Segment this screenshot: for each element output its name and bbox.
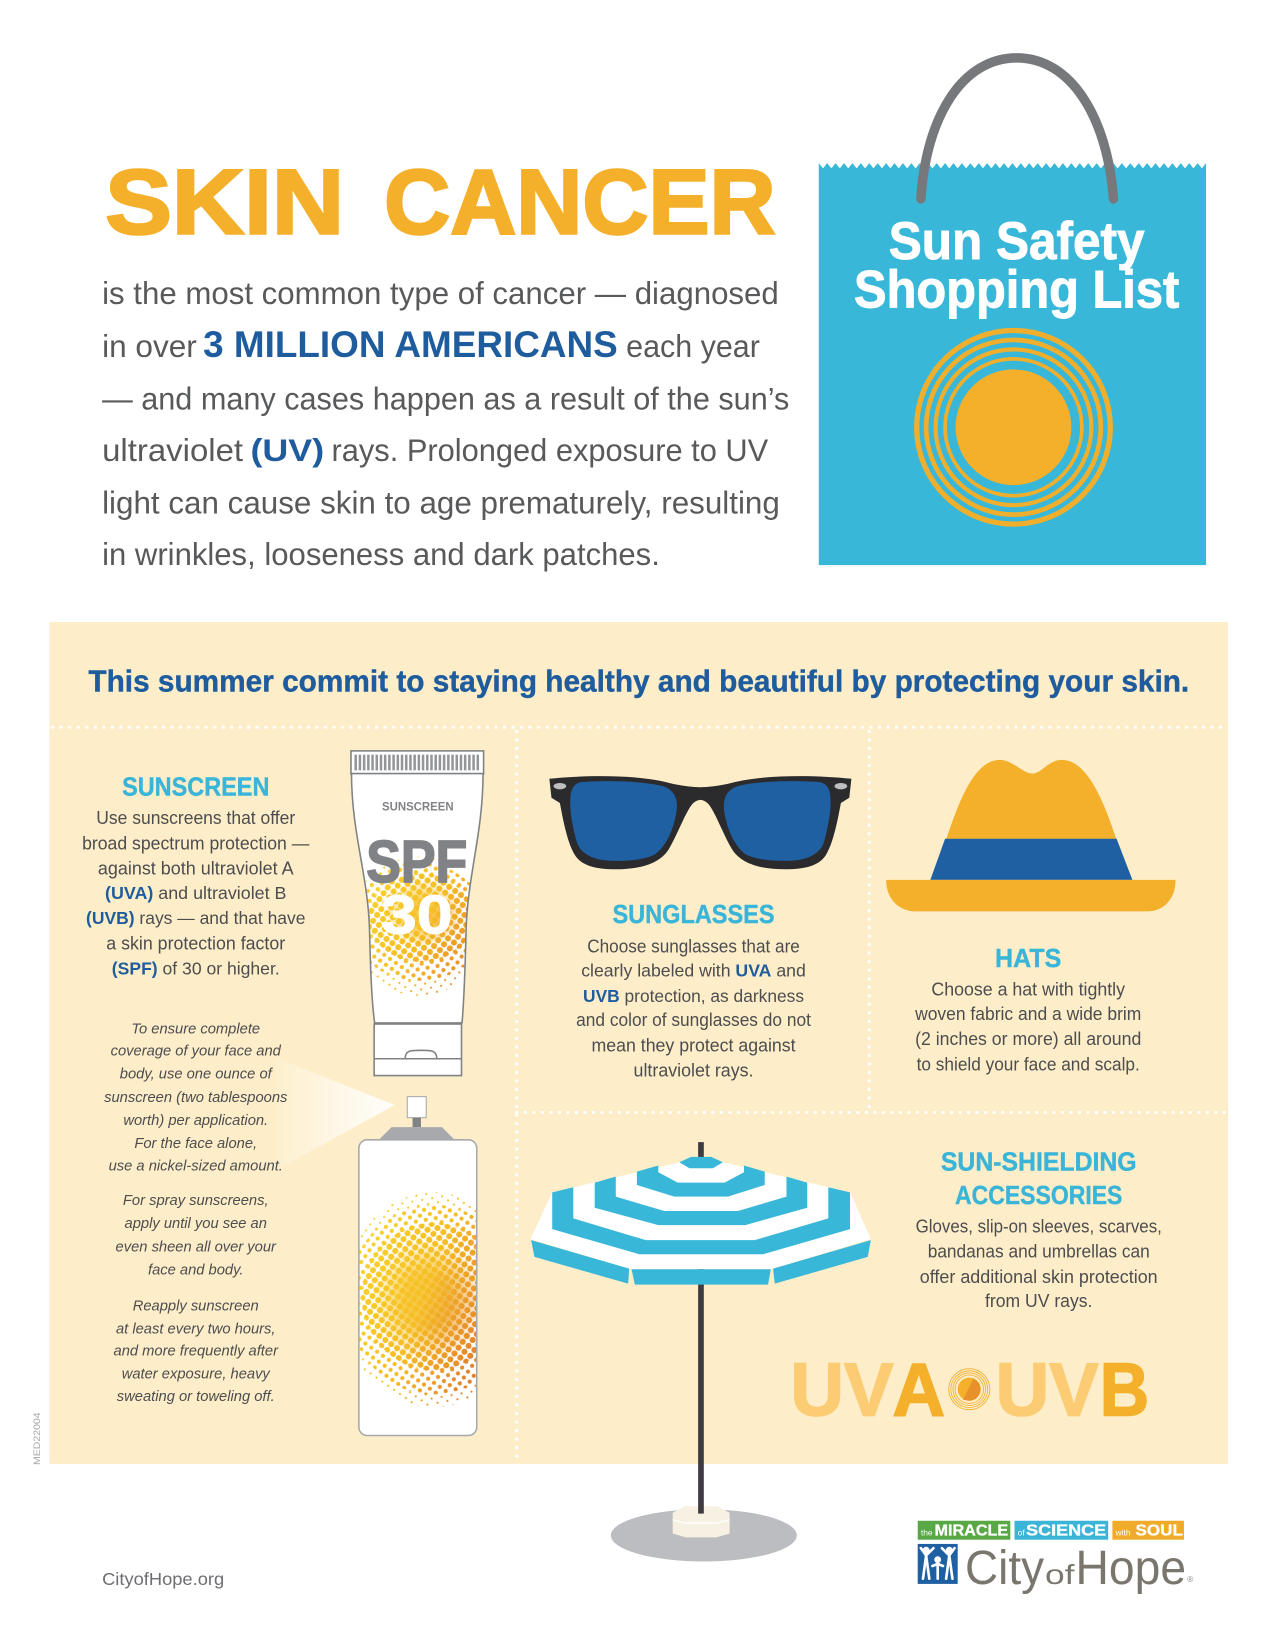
section: sunscreen text: (UVB) rays — and that have — [86, 908, 305, 928]
logo: City of Hope — [918, 1521, 1194, 1595]
footer url: CityofHope.org — [102, 1569, 224, 1589]
intro paragraph — [102, 275, 789, 572]
UVA UVB graphic: A — [892, 1348, 945, 1432]
logo: City of Hope: of — [1045, 1559, 1075, 1590]
section: sunglasses text: clearly labeled with UVA and — [581, 961, 806, 981]
section: sunscreen tips: coverage of your face and — [111, 1044, 282, 1060]
section: sunscreen text: broad spectrum protection — — [82, 832, 310, 853]
section: sunglasses text: Choose sunglasses that are — [587, 935, 800, 956]
section: sunscreen tips — [104, 1021, 288, 1405]
logo: City of Hope: City — [965, 1541, 1045, 1595]
section: sunscreen text: (UVA) and ultraviolet B — [105, 883, 286, 903]
UVA UVB graphic — [790, 1348, 1149, 1432]
icon: sun — [917, 330, 1110, 524]
section: sunscreen text: SUNSCREEN — [122, 772, 269, 802]
section: sunscreen tips: apply until you see an — [125, 1216, 267, 1232]
section: hats text: woven fabric and a wide brim — [914, 1003, 1141, 1024]
section: sunglasses text: UVB protection, as darkness — [583, 986, 804, 1006]
section: sunscreen tips: sweating or toweling off. — [117, 1389, 275, 1405]
section: accessories text: bandanas and umbrellas can — [928, 1241, 1150, 1262]
bag title: Sun Safety — [889, 212, 1145, 271]
bag title: Shopping List — [854, 260, 1179, 319]
section: sunscreen text: Use sunscreens that offer — [96, 807, 295, 828]
section: accessories text: from UV rays. — [985, 1290, 1092, 1311]
intro paragraph: ultraviolet — [102, 432, 243, 468]
section: sunscreen tips: sunscreen (two tablespoons — [104, 1090, 288, 1106]
section: sunglasses text: ultraviolet rays. — [634, 1060, 754, 1081]
bag title — [854, 212, 1179, 319]
intro paragraph: 3 MILLION AMERICANS — [203, 324, 618, 365]
section: sunscreen tips: even sheen all over your — [116, 1239, 277, 1255]
logo: City of Hope: MIRACLE — [935, 1522, 1008, 1539]
icon: sunglasses — [549, 776, 851, 869]
section: sunglasses text — [576, 899, 811, 1081]
intro paragraph: — and many cases happen as a result of the sun’s — [102, 380, 789, 416]
icon: sunscreen tube: SPF — [366, 830, 467, 895]
intro paragraph: each year — [626, 328, 760, 364]
icon: sunscreen tube — [347, 751, 484, 1076]
section: sunglasses text: SUNGLASSES — [613, 899, 775, 929]
title: CANCER — [384, 152, 776, 254]
title — [105, 152, 776, 254]
icon: shopping bag — [819, 58, 1206, 565]
section: accessories text: SUN-SHIELDING — [941, 1146, 1137, 1176]
logo: City of Hope: Hope — [1076, 1541, 1186, 1595]
intro paragraph: (UV) — [250, 432, 324, 468]
logo: City of Hope: SCIENCE — [1026, 1522, 1106, 1539]
section: sunscreen tips: at least every two hours, — [116, 1321, 276, 1337]
logo: City of Hope: with — [1115, 1527, 1131, 1537]
section: sunscreen tips: worth) per application. — [123, 1113, 268, 1129]
banner heading: This summer commit to staying healthy and beautiful by protecting your skin. — [88, 664, 1189, 698]
section: sunglasses text: mean they protect against — [591, 1034, 796, 1055]
section: sunscreen text: against both ultraviolet A — [98, 858, 294, 879]
intro paragraph: is the most common type of cancer — diagnosed — [102, 275, 779, 311]
section: sunscreen text — [82, 772, 310, 979]
UVA UVB graphic: UV — [996, 1348, 1099, 1432]
section: sunscreen tips: and more frequently after — [114, 1344, 279, 1360]
icon: hat — [886, 760, 1176, 911]
spray cone — [276, 1058, 395, 1170]
icon: sunscreen tube: SUNSCREEN — [382, 799, 454, 813]
intro paragraph: in over — [102, 328, 197, 364]
section: sunscreen text: (SPF) of 30 or higher. — [112, 959, 280, 979]
section: sunscreen tips: face and body. — [148, 1262, 243, 1278]
section: sunglasses text: and color of sunglasses do not — [576, 1009, 811, 1030]
section: hats text: Choose a hat with tightly — [931, 979, 1126, 1000]
section: accessories text: offer additional skin protection — [920, 1266, 1158, 1287]
section: sunscreen text: a skin protection factor — [106, 932, 285, 953]
icon: sunscreen tube: 30 — [381, 884, 453, 946]
section: hats text — [914, 943, 1141, 1074]
UVA UVB graphic: B — [1100, 1348, 1149, 1432]
logo: City of Hope: SOUL — [1136, 1522, 1183, 1539]
section: sunscreen tips: Reapply sunscreen — [133, 1298, 259, 1314]
logo: City of Hope: of — [1018, 1527, 1025, 1537]
title: SKIN — [105, 152, 344, 254]
logo: City of Hope: the — [921, 1527, 933, 1537]
section: hats text: HATS — [995, 943, 1061, 973]
section: accessories text: ACCESSORIES — [955, 1180, 1122, 1210]
section: accessories text: Gloves, slip-on sleeves, scarves, — [916, 1215, 1162, 1236]
section: hats text: to shield your face and scalp. — [917, 1053, 1140, 1074]
UVA UVB graphic: UV — [790, 1348, 894, 1432]
job code: MED22004 — [32, 1412, 43, 1465]
logo: City of Hope: ® — [1187, 1574, 1194, 1584]
section: hats text: (2 inches or more) all around — [915, 1028, 1141, 1049]
panel: shopping list — [49, 622, 1228, 1464]
icon: beach umbrella — [530, 1142, 871, 1561]
section: sunscreen tips: To ensure complete — [131, 1021, 260, 1037]
intro paragraph: rays. Prolonged exposure to UV — [332, 432, 768, 468]
icon: spray can — [353, 1097, 484, 1436]
section: sunscreen tips: For the face alone, — [134, 1136, 257, 1152]
intro paragraph: in wrinkles, looseness and dark patches. — [102, 536, 660, 572]
section: sunscreen tips: body, use one ounce of — [120, 1067, 274, 1083]
section: sunscreen tips: water exposure, heavy — [122, 1367, 271, 1383]
section: sunscreen tips: For spray sunscreens, — [123, 1193, 269, 1209]
section: sunscreen tips: use a nickel-sized amount. — [109, 1158, 283, 1174]
intro paragraph: light can cause skin to age prematurely, resulting — [102, 485, 780, 521]
section: accessories text — [916, 1146, 1162, 1311]
